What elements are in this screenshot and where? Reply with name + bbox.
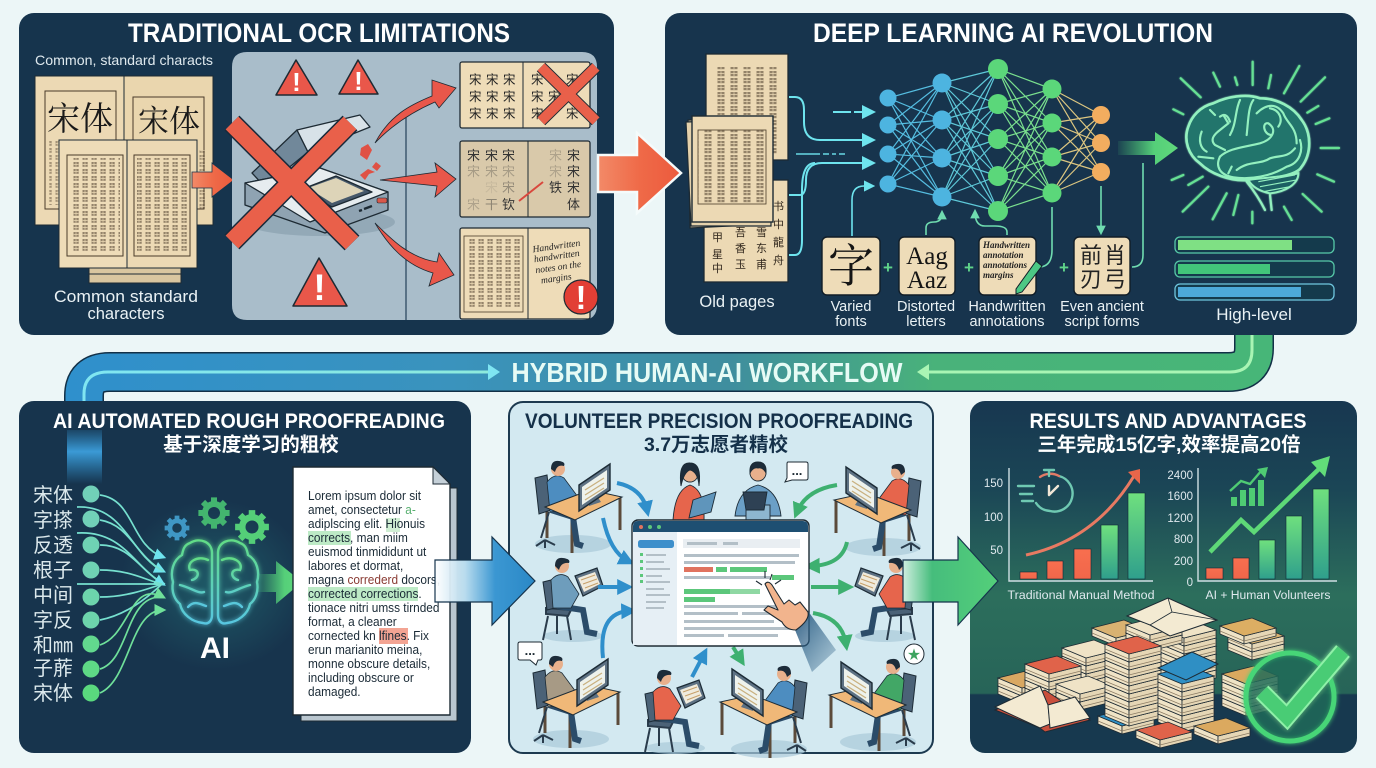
- heading: chinese subtitle: 三年完成15亿字,效率提高20倍: [1037, 433, 1301, 456]
- plus signs: +: [883, 258, 893, 277]
- card: ancient script: 弓: [1104, 267, 1126, 292]
- document: corrected text: amet, consectetur a-: [308, 503, 416, 517]
- captions: input types: Distorted: [897, 299, 955, 315]
- document: corrected text: monne obscure details,: [308, 657, 430, 671]
- icon: pencil: [1016, 261, 1042, 294]
- document: corrected text: cornected kn lfines. Fix: [308, 629, 430, 643]
- icon: warning triangles: [276, 60, 378, 308]
- icon: old pages: 星: [712, 248, 723, 261]
- worker: top left: [535, 461, 622, 553]
- card: ancient script: 肖: [1104, 243, 1126, 268]
- illustration: pile of books: [995, 598, 1284, 748]
- heading: TRADITIONAL OCR LIMITATIONS: [128, 18, 510, 48]
- thumbnail: rejected standard page: 宋: [469, 72, 482, 87]
- card: handwritten annotations: Handwritten: [982, 240, 1030, 250]
- thumbnail: degraded page: 宋: [467, 164, 480, 179]
- thumbnail: rejected standard page: 宋: [486, 106, 499, 121]
- open book: [995, 686, 1090, 732]
- connector lines: inputs to network: [926, 163, 1143, 267]
- document: corrected text: adiplscing elit. Hionuis: [308, 517, 425, 531]
- captions: input types: Even ancient: [1060, 299, 1144, 315]
- arrow: AI to volunteers: [435, 537, 535, 625]
- chart: AI and human volunteers: 800: [1174, 534, 1193, 546]
- thumbnail: rejected standard page: 宋: [531, 89, 544, 104]
- plus signs: [883, 258, 1069, 277]
- worker: bottom woman: [645, 670, 705, 754]
- icon: back open book: [35, 76, 213, 225]
- icon: chat bubble top: ...: [792, 463, 802, 478]
- thumbnail: rejected standard page: [460, 62, 596, 128]
- thumbnail: degraded page: 宋: [502, 148, 515, 163]
- icon: old pages: 中: [773, 218, 784, 231]
- icon: pointing hand: [756, 571, 836, 672]
- thumbnail: degraded page: 宋: [467, 197, 480, 212]
- card: ancient script: 前: [1080, 243, 1102, 268]
- character input list: 反透: [33, 534, 73, 557]
- icon: old pages: 甫: [756, 258, 767, 271]
- thumbnail: rejected standard page: 宋: [486, 89, 499, 104]
- heading: AI AUTOMATED ROUGH PROOFREADING: [53, 410, 445, 433]
- character input list: 宋体: [33, 682, 73, 705]
- thumbnail: handwritten notes page: margins: [540, 272, 573, 286]
- glow behind brain: [120, 500, 310, 670]
- label: AI: AI: [200, 632, 230, 665]
- chart: AI and human volunteers: 0: [1187, 577, 1193, 589]
- caption: high-level: High-level: [1216, 305, 1292, 324]
- caption: AI + Human Volunteers: [1206, 588, 1330, 602]
- icon: glowing check badge: [1246, 651, 1343, 741]
- character input list: 根子: [33, 559, 73, 582]
- thumbnail: handwritten notes page: Handwritten: [531, 239, 581, 255]
- worker: standing man: [735, 462, 781, 520]
- character input list: 中间: [33, 584, 73, 607]
- document: corrected text: Lorem ipsum dolor sit: [308, 489, 422, 503]
- panel: volunteer precision proofreading: [509, 402, 933, 758]
- card: handwritten annotations: [979, 237, 1042, 295]
- plus signs: +: [1059, 258, 1069, 277]
- icon: stopwatch: [1018, 470, 1073, 512]
- character input list: [33, 484, 100, 705]
- arrow: AI to document: [258, 561, 302, 604]
- chart: AI and human volunteers: 1600: [1167, 491, 1193, 503]
- thumbnail: degraded page: 宋: [567, 180, 580, 195]
- panel: traditional OCR limitations: [19, 13, 614, 335]
- captions: input types: fonts: [835, 314, 867, 330]
- icon: old pages: 中: [712, 262, 723, 275]
- icon: small X: [541, 67, 596, 121]
- icon: chat bubble left: ...: [525, 643, 535, 658]
- chart: AI and human volunteers: [1167, 456, 1337, 602]
- arrow: limitations to deep learning: [598, 133, 681, 213]
- character input list: 和㎜: [33, 634, 73, 657]
- caption: old pages: Old pages: [699, 293, 775, 311]
- plus signs: +: [964, 258, 974, 277]
- card: ancient script: 刃: [1080, 267, 1102, 292]
- workflow drop-in: [67, 430, 102, 484]
- thumbnail: rejected standard page: 宋: [486, 72, 499, 87]
- arrows: characters into AI: [77, 495, 165, 693]
- thumbnail: degraded page: 宋: [567, 164, 580, 179]
- document: corrected text: format, a cleaner: [308, 615, 397, 629]
- card: handwritten annotations: annotations: [983, 260, 1028, 270]
- card: ancient script: [1074, 237, 1130, 295]
- arrows: blue submissions: [598, 483, 704, 677]
- thumbnail: rejected standard page: 宋: [469, 89, 482, 104]
- caption: Traditional Manual Method: [1008, 588, 1155, 602]
- document: corrected text: euismod tinmididunt ut: [308, 545, 427, 559]
- icon: warning triangles: !: [313, 267, 326, 308]
- heading: chinese subtitle: 基于深度学习的粗校: [163, 433, 339, 456]
- arrows: green returns: [733, 485, 847, 660]
- chart: traditional manual method: 150: [984, 478, 1003, 490]
- card: distorted letters: Aag: [906, 243, 948, 270]
- thumbnail: rejected standard page: 宋: [566, 72, 579, 87]
- worker: bottom centre: [720, 666, 807, 758]
- worker: standing woman: [673, 463, 716, 520]
- chart: neural network: [880, 59, 1110, 221]
- arrow: book to scanner: [192, 163, 234, 197]
- heading: workflow: HYBRID HUMAN-AI WORKFLOW: [512, 357, 903, 388]
- thumbnail: rejected standard page: 宋: [503, 72, 516, 87]
- heading: DEEP LEARNING AI REVOLUTION: [813, 18, 1213, 48]
- character input list: 字反: [33, 609, 73, 632]
- caption: common characters: Common, standard characts: [35, 52, 213, 68]
- thumbnail: degraded page: 宋: [549, 148, 562, 163]
- thumbnail: rejected standard page: 宋: [548, 89, 561, 104]
- thumbnail: handwritten notes page: notes on the: [535, 260, 582, 276]
- thumbnail: degraded page: 铁: [549, 180, 562, 195]
- icon: old pages: 香: [735, 242, 746, 255]
- document: corrected text: labores et dormat,: [308, 559, 403, 573]
- icon: old pages: 舟: [773, 253, 784, 267]
- arrow: to standard page: [375, 80, 456, 143]
- panel: results and advantages: [970, 401, 1357, 753]
- icon: old pages: 玉: [735, 259, 746, 271]
- chart: AI and human volunteers: 1200: [1167, 513, 1193, 525]
- arrow: volunteers to results: [903, 537, 998, 625]
- icon: scanner: [245, 115, 395, 236]
- icon: chat bubble left: [518, 642, 542, 665]
- workflow connector band: [84, 335, 1254, 405]
- thumbnail: handwritten notes page: [460, 228, 598, 319]
- card: varied fonts: 字: [828, 230, 874, 296]
- thumbnail: degraded page: 宋: [567, 148, 580, 163]
- icon: star bubble right: ★: [907, 647, 921, 662]
- panel: deep learning AI revolution: [665, 13, 1357, 335]
- thumbnail: handwritten notes page: handwritten: [533, 249, 581, 265]
- thumbnail: rejected standard page: 宋: [503, 106, 516, 121]
- icon: back open book: 宋体: [47, 93, 113, 140]
- captions: input types: annotations: [970, 314, 1044, 330]
- panel: scanner failure area: [232, 52, 598, 320]
- icon: old pages: 甲: [712, 232, 723, 244]
- document: corrected text: corrects, man miim: [308, 531, 408, 545]
- card: distorted letters: [899, 237, 955, 295]
- document: corrected text: damaged.: [308, 685, 361, 699]
- panel: AI automated rough proofreading: [19, 401, 471, 753]
- arrow: to faded page: [380, 163, 456, 197]
- thumbnail: rejected standard page: 宋: [531, 72, 544, 87]
- heading: RESULTS AND ADVANTAGES: [1030, 410, 1306, 433]
- thumbnail: degraded page: 宋: [485, 164, 498, 179]
- arrows: pages into network: [789, 97, 872, 255]
- worker: bottom left: [533, 656, 620, 748]
- thumbnail: degraded page: [460, 141, 590, 217]
- thumbnail: degraded page: 宋: [485, 180, 498, 195]
- character input list: 子葄: [33, 657, 73, 680]
- captions: input types: Varied: [831, 299, 871, 315]
- card: distorted letters: Aaz: [907, 267, 947, 294]
- icon: big red X: [232, 123, 352, 243]
- caption: common standard characters: [54, 288, 198, 323]
- icon: AI brain: [172, 540, 258, 623]
- heading: chinese subtitle: 3.7万志愿者精校: [644, 433, 789, 456]
- thumbnail: degraded page: 体: [567, 197, 580, 212]
- chart: AI and human volunteers: 2400: [1167, 470, 1193, 482]
- icon: mismatch arrow: [519, 182, 543, 201]
- captions: input types: letters: [906, 314, 946, 330]
- icon: red debris: [360, 144, 381, 180]
- thumbnail: degraded page: 宋: [502, 180, 515, 195]
- shared proofreading window: [632, 520, 809, 646]
- caption: common standard characters: Common standard: [54, 288, 198, 306]
- icon: front open book: [59, 140, 197, 283]
- worker: mid right: [855, 558, 915, 642]
- thumbnail: degraded page: 钦: [502, 197, 515, 212]
- icon: glowing brain: [1172, 62, 1339, 223]
- thumbnail: degraded page: 宋: [485, 148, 498, 163]
- icon: star bubble right: [904, 644, 924, 664]
- icon: old pages: 龍: [773, 235, 784, 249]
- thumbnail: degraded page: 宋: [549, 164, 562, 179]
- document: corrected text: [293, 467, 457, 721]
- chart: traditional manual method: [984, 468, 1155, 602]
- icon: old pages: 雪: [756, 226, 767, 239]
- arrow: trend: [1026, 476, 1134, 555]
- thumbnail: degraded page: 干: [485, 197, 498, 212]
- document: corrected text: magna correderd docors,: [308, 573, 440, 587]
- document: corrected text: including obscure or: [308, 671, 414, 685]
- icon: old pages: 书: [773, 200, 784, 213]
- chart: traditional manual method: 50: [990, 545, 1003, 557]
- icon: small growth chart: [1230, 467, 1268, 506]
- chart: traditional manual method: 100: [984, 512, 1003, 524]
- arrow: network to brain: [1118, 132, 1178, 165]
- icon: red alert: !: [576, 279, 586, 316]
- worker: top right: [834, 464, 921, 556]
- thumbnail: rejected standard page: 宋: [531, 106, 544, 121]
- icon: old pages: [686, 54, 788, 282]
- captions: input types: script forms: [1065, 314, 1139, 330]
- heading: VOLUNTEER PRECISION PROOFREADING: [525, 410, 913, 433]
- captions: input types: Handwritten: [968, 299, 1046, 315]
- thumbnail: degraded page: 宋: [502, 164, 515, 179]
- icon: back open book: 宋体: [138, 96, 200, 141]
- worker: bottom right: [829, 659, 916, 751]
- chart: progress bars: [1175, 237, 1334, 300]
- character input list: 字搽: [33, 509, 73, 532]
- arrow: trend: [1210, 466, 1322, 552]
- icon: warning triangles: !: [292, 67, 301, 97]
- captions: input types: [831, 299, 1144, 330]
- thumbnail: rejected standard page: 宋: [469, 106, 482, 121]
- document: corrected text: corrected corrections.: [308, 587, 422, 601]
- icon: chat bubble top: [785, 462, 808, 482]
- card: handwritten annotations: annotation: [983, 250, 1024, 260]
- card: handwritten annotations: margins: [983, 270, 1014, 280]
- arrow: to annotated page: [375, 223, 454, 286]
- thumbnail: degraded page: 宋: [467, 148, 480, 163]
- chart: AI and human volunteers: 200: [1174, 556, 1193, 568]
- thumbnail: rejected standard page: 宋: [503, 89, 516, 104]
- document: corrected text: tionace nitri umss tirnded: [308, 601, 440, 615]
- worker: mid left: [543, 558, 603, 642]
- icon: old pages: 吾: [735, 226, 746, 239]
- icon: old pages: 东: [756, 242, 767, 255]
- thumbnail: rejected standard page: 宋: [566, 106, 579, 121]
- document: corrected text: erun marianito meina,: [308, 643, 422, 657]
- icon: warning triangles: !: [354, 66, 363, 96]
- caption: common standard characters: characters: [87, 305, 165, 323]
- icon: gears: [165, 497, 269, 544]
- character input list: 宋体: [33, 484, 73, 507]
